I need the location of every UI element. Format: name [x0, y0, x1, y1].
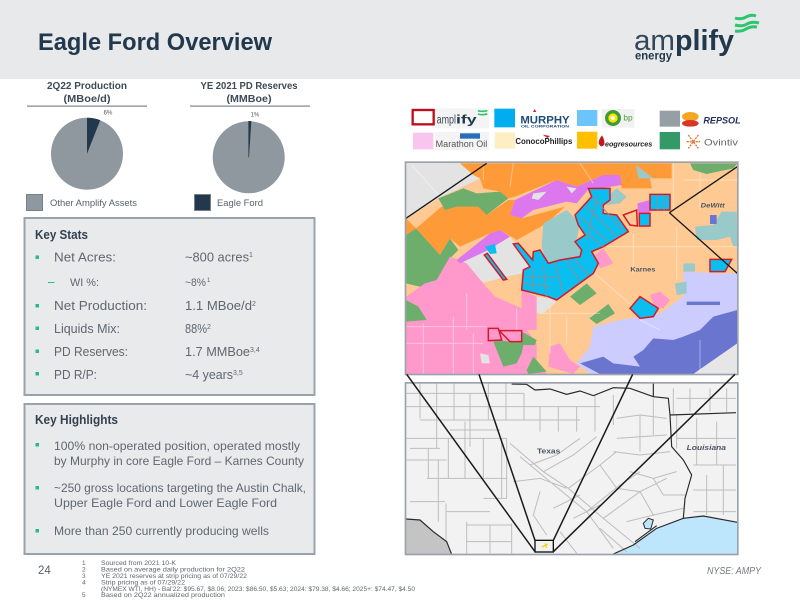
legend: bp: bp — [623, 113, 633, 123]
header band — [0, 0, 800, 79]
label: dewitt: DeWitt — [701, 203, 726, 210]
heading: key highlights: Key Highlights — [35, 413, 118, 427]
legend: marathon oil: Marathon Oil — [436, 139, 487, 149]
pie chart: reserves: 1% — [251, 112, 260, 118]
footnotes: 1 — [82, 560, 86, 567]
legend: murphy — [494, 109, 570, 129]
logo: amplify energy — [634, 15, 759, 62]
legend: repsol — [660, 111, 741, 127]
lease tract dividers — [523, 195, 664, 297]
chart heading: production — [27, 80, 147, 107]
legend: conocophillips — [495, 132, 572, 149]
highlight: non-operated position — [54, 439, 304, 468]
amplify acreage outlines — [484, 188, 732, 342]
highlight: gross locations: ~250 gross locations targeting the Austin Chalk, — [54, 481, 306, 495]
footnotes: 4 — [82, 580, 86, 586]
panel: key stats — [24, 218, 314, 395]
legend: amplify: ify — [456, 112, 477, 126]
footnotes: 3 — [82, 573, 86, 580]
connector lines between maps — [407, 374, 735, 552]
label: louisiana: Louisiana — [687, 443, 726, 452]
stat: working interest — [48, 277, 211, 289]
stat: pd r/p — [54, 367, 243, 382]
logo: amplify energy: energy — [635, 50, 673, 62]
stat: pd reserves: 1.7 MMBoe — [185, 344, 250, 359]
heading: key stats: Key Stats — [35, 228, 88, 242]
footnotes: Strip pricing as of 07/29/22 — [101, 580, 185, 586]
stat: pd reserves: PD Reserves: — [54, 344, 128, 359]
pie chart: production — [51, 110, 123, 190]
footnotes: 5 — [82, 592, 86, 599]
map: texas and louisiana — [405, 382, 738, 555]
county lines — [407, 383, 736, 553]
stat: pd reserves — [54, 344, 260, 359]
water: gulf of mexico — [613, 516, 737, 555]
mexico — [406, 519, 452, 554]
coast and bay — [406, 516, 737, 554]
footnotes: Sourced from 2021 10-K — [101, 560, 177, 567]
legend: eog resources — [577, 132, 652, 149]
footnotes: Based on 2Q22 annualized production — [101, 592, 225, 599]
footnotes — [82, 560, 415, 599]
legend: other assets: Other Amplify Assets — [50, 198, 137, 209]
locator box — [535, 540, 553, 552]
panel: key highlights — [24, 404, 314, 554]
highlight bullets — [36, 443, 39, 532]
label: karnes: Karnes — [630, 267, 656, 274]
footnotes: Based on average daily production for 2Q22 — [101, 566, 246, 574]
legend: conocophillips: ConocoPhillips — [515, 136, 572, 146]
connector lines in map — [406, 163, 737, 273]
chart heading: reserves: (MMBoe) — [226, 93, 272, 105]
chart heading: production: 2Q22 Production — [47, 80, 127, 92]
legend: bp — [577, 109, 634, 128]
stat: liquids mix: 2 — [207, 324, 211, 331]
legend: marathon oil — [413, 132, 489, 150]
legend: murphy: OIL CORPORATION — [521, 125, 569, 129]
highlight: non-operated position: by Murphy in core Eagle Ford – Karnes County — [54, 454, 304, 468]
pie chart: reserves — [213, 112, 285, 193]
legend: amplify — [413, 108, 489, 128]
highlight: gross locations — [54, 481, 306, 510]
footnotes: (NYMEX WTI, HH) - Bal'22: $95.67, $8.06; 2023: $86.50, $5.63; 2024: $79.38, $4.66; 2025+: $74.47, $4.50 — [101, 586, 415, 593]
legend: eog resources: eogresources — [605, 142, 652, 149]
stat: net production: 2 — [252, 301, 256, 308]
stat: net acres: 1 — [249, 252, 253, 259]
footnotes: YE 2021 reserves at strip pricing as of 07/29/22 — [101, 573, 247, 580]
legend: ovintiv: Ovintiv — [704, 137, 739, 147]
stat: liquids mix: 88% — [185, 321, 207, 336]
lease lines — [407, 163, 737, 373]
stat: net production: Net Production: — [54, 298, 147, 313]
stat: net production: 1.1 MBoe/d — [185, 298, 252, 313]
highlight: non-operated position: 100% non-operated position, operated mostly — [54, 439, 300, 453]
state borders — [512, 383, 736, 518]
legend: other assets — [26, 194, 137, 210]
label: texas: Texas — [537, 446, 560, 455]
stat: working interest: 1 — [207, 278, 211, 284]
stat: pd r/p: ~4 years — [185, 367, 233, 382]
stat: working interest: WI %: — [70, 277, 99, 289]
operator legend — [413, 108, 741, 150]
stat: net acres: Net Acres: — [54, 250, 116, 264]
highlight: gross locations: Upper Eagle Ford and Lower Eagle Ford — [54, 496, 277, 510]
stat: net acres: ~800 acres — [185, 250, 249, 264]
footnotes: 2 — [82, 566, 86, 574]
logo: amplify energy: plify — [675, 25, 734, 57]
stat: pd r/p: PD R/P: — [54, 367, 97, 382]
stat: pd r/p: 3,5 — [233, 370, 243, 377]
stat bullets — [36, 256, 39, 376]
stat: working interest: ~8% — [185, 277, 206, 289]
legend: eagle ford: Eagle Ford — [217, 198, 263, 209]
stat: pd reserves: 3,4 — [250, 347, 260, 354]
legend: eagle ford — [194, 194, 263, 210]
pie chart: production: 6% — [104, 110, 113, 116]
stat: net production — [54, 298, 256, 313]
map: karnes acreage — [405, 162, 738, 375]
chart heading: reserves: YE 2021 PD Reserves — [200, 80, 298, 92]
stat: net acres — [54, 250, 253, 264]
legend: repsol: REPSOL — [703, 115, 741, 125]
logo: amplify energy: am — [634, 25, 675, 57]
highlight: producing wells: More than 250 currently producing wells — [54, 524, 269, 538]
chart heading: production: (MBoe/d) — [64, 93, 110, 105]
legend: amplify: ampl — [437, 112, 456, 126]
legend: ovintiv — [660, 132, 739, 149]
chart heading: reserves — [190, 80, 310, 107]
ticker: NYSE: AMPY — [707, 566, 762, 577]
legend: murphy: MURPHY — [520, 115, 570, 127]
title: Eagle Ford Overview — [38, 29, 272, 56]
stat: liquids mix — [54, 321, 211, 336]
page number: 24 — [38, 565, 51, 577]
stat: liquids mix: Liquids Mix: — [54, 321, 120, 336]
